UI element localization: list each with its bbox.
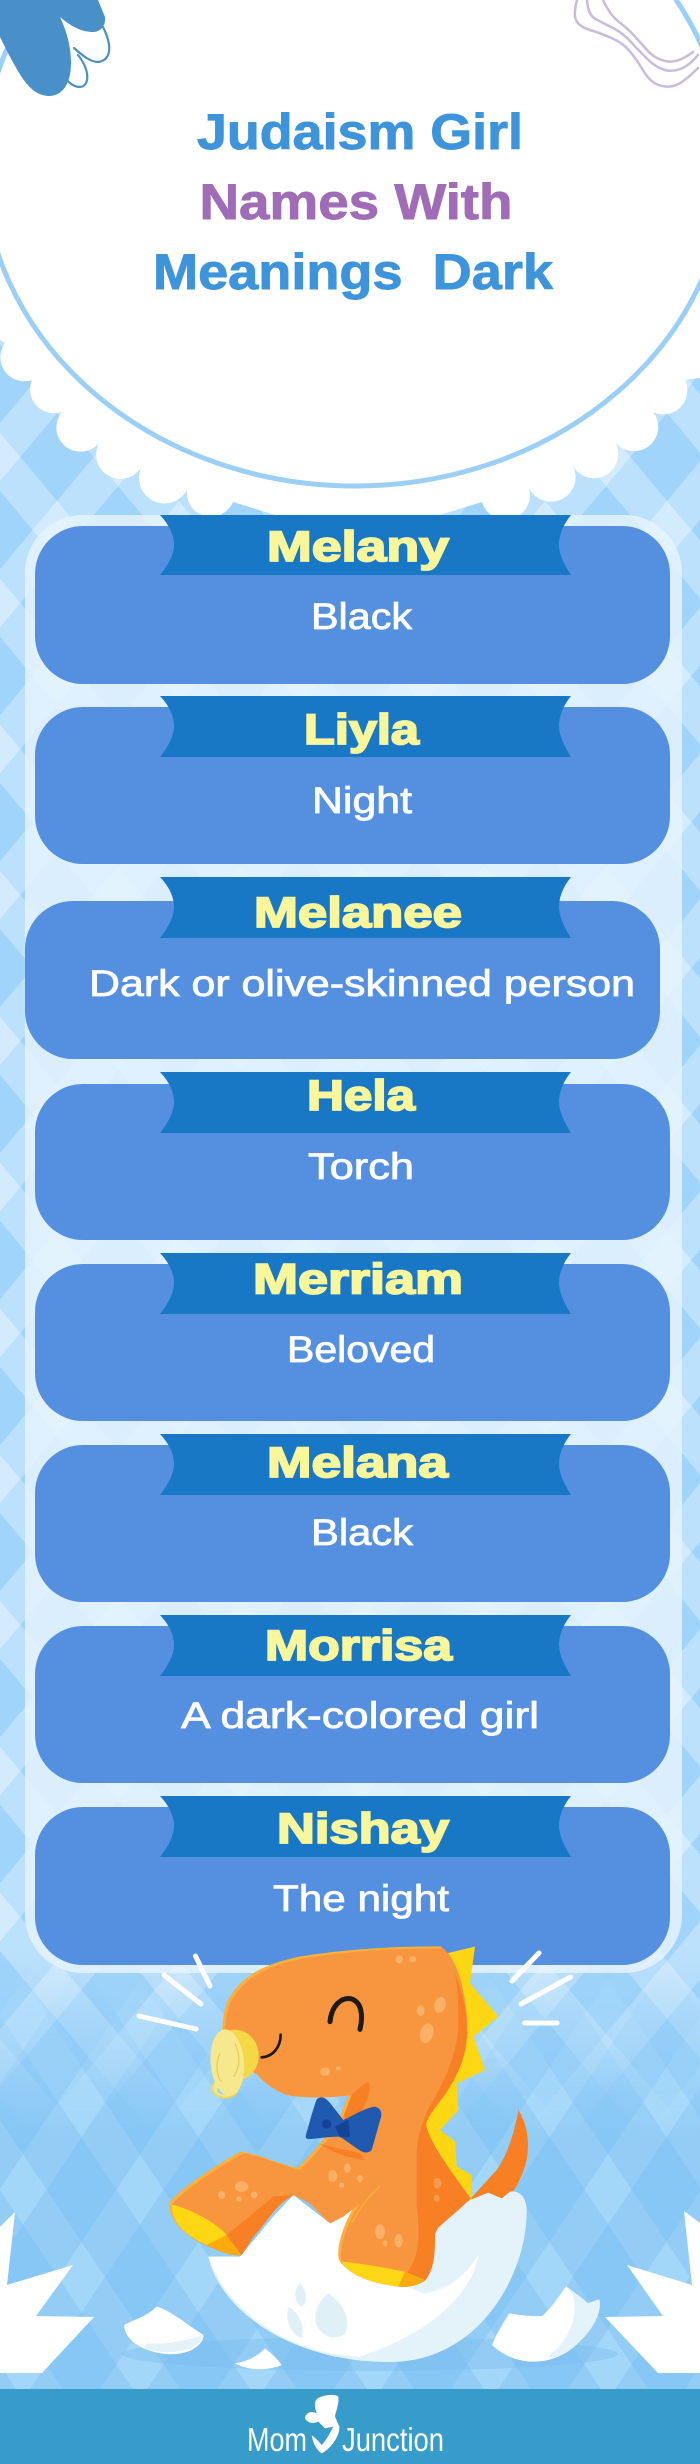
illustration: dinosaur hatching from egg xyxy=(169,1946,528,2362)
dino darker back shading xyxy=(407,1973,471,2281)
card: Merriam: Beloved xyxy=(287,1329,435,1370)
dino open eye xyxy=(330,1999,362,2029)
card: Hela: Torch xyxy=(308,1146,414,1187)
footer bar xyxy=(0,2389,700,2464)
dino closed eye xyxy=(262,2035,281,2057)
card: Liyla: Night xyxy=(312,780,413,821)
card: Morrisa: Morrisa xyxy=(265,1622,453,1670)
shell fragment left xyxy=(124,2307,203,2354)
card: Merriam xyxy=(35,1253,670,1421)
card: Merriam: Merriam xyxy=(253,1256,463,1304)
egg shell xyxy=(208,2191,527,2362)
card: Liyla: Liyla xyxy=(304,706,420,754)
card: Melanee: Melanee xyxy=(254,889,462,937)
sparkle lines around dinosaur xyxy=(139,1953,570,2029)
white burst right xyxy=(605,2211,700,2373)
card: Melana: Melana xyxy=(267,1439,449,1487)
card: Melany: Melany xyxy=(267,523,449,571)
logo icon: mother and baby xyxy=(305,2395,339,2453)
icon: purple squiggle corner decoration xyxy=(575,0,698,87)
card: Hela: Hela xyxy=(307,1072,416,1120)
title: Meanings Dark xyxy=(153,244,553,300)
dino back spikes xyxy=(423,1947,498,2203)
dino arm foot xyxy=(172,2205,227,2245)
card: Melana: Black xyxy=(311,1512,414,1553)
dino arm shading xyxy=(227,2195,293,2255)
logo: MomJunction: Mom xyxy=(247,2421,307,2458)
title: Names With xyxy=(200,174,512,230)
card: Nishay: The night xyxy=(273,1878,450,1919)
card: Nishay: Nishay xyxy=(277,1805,449,1853)
card: Morrisa xyxy=(35,1615,670,1783)
card: Melana xyxy=(35,1434,670,1602)
shell fragment small xyxy=(235,2348,282,2369)
dino front foot xyxy=(342,2262,405,2287)
card: Nishay xyxy=(35,1796,670,1965)
card: Melany xyxy=(35,515,670,684)
title xyxy=(153,104,553,300)
pacifier xyxy=(208,2027,262,2098)
card: Melanee: Dark or olive-skinned person xyxy=(89,963,635,1004)
leg highlight line xyxy=(352,2186,380,2223)
dino tail xyxy=(463,2110,528,2207)
bow tie xyxy=(306,2097,381,2153)
card: Liyla xyxy=(35,696,670,864)
panel: names list backing xyxy=(25,515,682,1973)
dino spots xyxy=(218,1955,448,2247)
shell fragment right xyxy=(492,2286,600,2362)
ground shadow xyxy=(122,2337,618,2371)
dino chin and neck shading xyxy=(320,2082,370,2160)
white burst left xyxy=(0,2212,94,2373)
dino body rim xyxy=(169,1946,468,2285)
dino arm toe xyxy=(207,2235,241,2255)
card: Morrisa: A dark-colored girl xyxy=(181,1695,539,1736)
dino body xyxy=(172,1948,471,2287)
icon: blue bootie corner decoration xyxy=(0,0,109,96)
card: Melanee xyxy=(25,877,660,1059)
card: Hela xyxy=(35,1072,670,1240)
title: Judaism Girl xyxy=(197,104,523,160)
logo: MomJunction: Junction xyxy=(342,2421,444,2458)
logo: MomJunction xyxy=(247,2395,444,2458)
card: Melany: Black xyxy=(311,596,413,637)
dino front toe xyxy=(398,2272,425,2287)
header: scalloped white circle xyxy=(0,0,700,520)
